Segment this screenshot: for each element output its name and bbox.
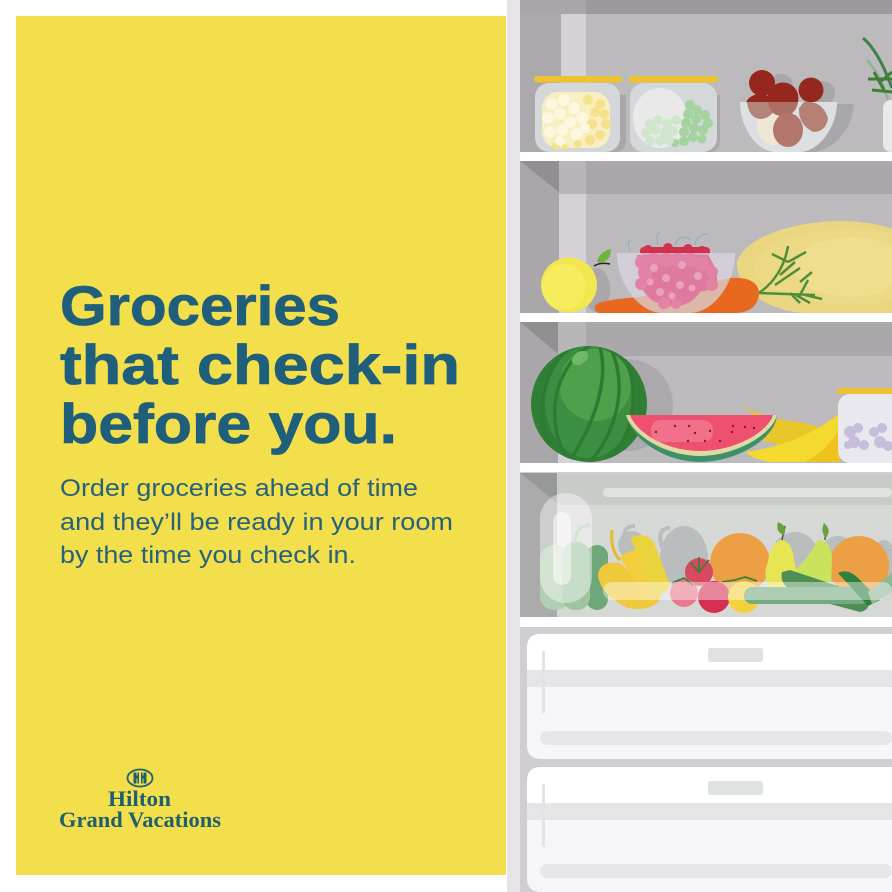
carrot greens [759, 246, 822, 303]
oranges [710, 533, 889, 596]
yellow pepper [598, 530, 670, 609]
small yellow fruit [722, 577, 760, 613]
crisper produce [540, 493, 892, 613]
cucumbers [744, 570, 892, 612]
watermelon [531, 346, 673, 462]
logo: Hilton Grand Vacations: Hilton [108, 786, 171, 811]
shelves [520, 152, 892, 627]
logo: Hilton Grand Vacations: Grand Vacations [59, 807, 221, 832]
body text [60, 475, 453, 569]
herbs and jar, top right [863, 38, 892, 152]
banana [741, 406, 840, 462]
shelf compartment 1 background [520, 0, 892, 152]
drawer 2 [527, 767, 892, 892]
shelf compartment 3 background [520, 322, 892, 463]
panel: fridge interior [507, 0, 892, 892]
bowl of plums [740, 70, 854, 152]
watermelon slice [626, 415, 777, 462]
heading: that check-in [60, 333, 460, 396]
jar of peas [629, 76, 720, 152]
melon [737, 221, 892, 313]
grey pepper shadows [618, 526, 892, 600]
lemon [541, 249, 611, 312]
drawer 1 handle [708, 648, 763, 662]
heading [60, 274, 460, 455]
crisper compartment background [520, 473, 892, 617]
icon: Hilton emblem [128, 770, 152, 786]
body text: and they’ll be ready in your room [60, 509, 453, 536]
bowl of raspberries [617, 232, 735, 313]
body text: by the time you check in. [60, 542, 356, 569]
jar of lavender items [837, 388, 892, 463]
crisper glass band [603, 582, 892, 600]
carrot [595, 246, 822, 313]
pears [765, 522, 832, 590]
logo: Hilton Grand Vacations [59, 770, 221, 832]
tomatoes [670, 557, 730, 613]
heading: before you. [60, 392, 397, 455]
jar of corn [534, 76, 626, 152]
shelf compartment 2 background [520, 161, 892, 313]
crisper glass knob [540, 493, 592, 603]
green pepper [540, 525, 608, 610]
drawer 1 [527, 634, 892, 759]
drawer 2 handle [708, 781, 763, 795]
body text: Order groceries ahead of time [60, 475, 418, 502]
panel: yellow text panel [16, 16, 506, 875]
heading: Groceries [60, 274, 340, 337]
